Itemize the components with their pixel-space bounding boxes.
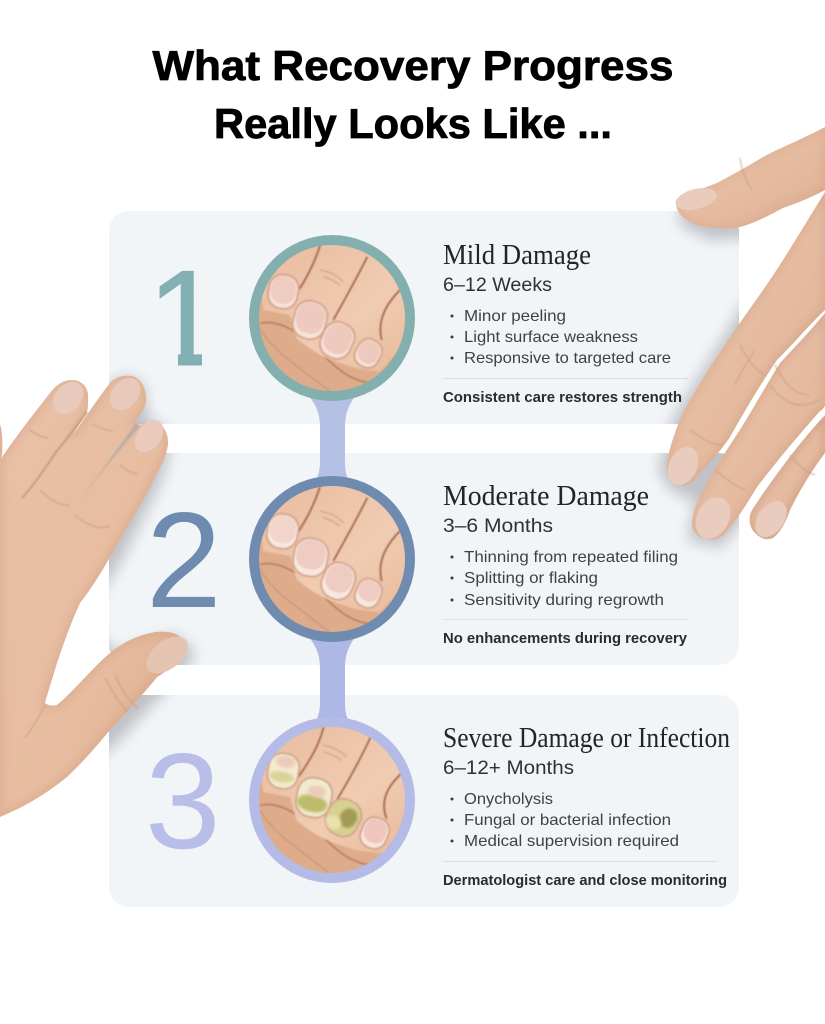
bullet list	[450, 549, 678, 609]
bullet list: Medical supervision required	[464, 833, 679, 850]
bullet list: Responsive to targeted care	[464, 350, 671, 367]
bullet list: Onycholysis	[464, 791, 553, 808]
right hand	[662, 127, 825, 545]
duration: 6–12+ Months	[443, 758, 574, 779]
bullet list: Light surface weakness	[464, 329, 638, 346]
bullet list: Sensitivity during regrowth	[464, 592, 664, 609]
panel: severe damage	[109, 695, 739, 907]
heading: moderate damage: Moderate Damage	[443, 481, 649, 512]
number 1: 1	[147, 242, 223, 394]
bullet list: Minor peeling	[464, 308, 566, 325]
nail: thumb	[673, 184, 719, 214]
step 3 circle illustration	[249, 717, 417, 883]
bullet list: Splitting or flaking	[464, 570, 598, 587]
nail: index finger	[662, 442, 704, 490]
nail: ring finger	[749, 495, 793, 543]
number 2: 2	[146, 484, 222, 636]
nail: middle finger	[689, 491, 737, 545]
bullet list: Thinning from repeated filing	[464, 549, 678, 566]
connector: step 2 to 3	[309, 637, 355, 731]
nail: thumb	[139, 629, 195, 681]
nail: little finger	[46, 376, 90, 420]
bullet list	[450, 791, 679, 850]
takeaway: Consistent care restores strength	[443, 389, 682, 406]
left hand	[0, 372, 195, 817]
step 2 circle illustration	[249, 476, 417, 642]
takeaway: Dermatologist care and close monitoring	[443, 872, 727, 889]
heading: mild damage: Mild Damage	[443, 240, 591, 271]
hand shadows on cards	[109, 211, 739, 760]
nail: ring finger	[103, 372, 147, 416]
panel: mild damage	[109, 211, 739, 424]
nail: middle finger	[129, 414, 169, 458]
panel: moderate damage	[109, 453, 739, 665]
title	[152, 42, 674, 147]
duration: 3–6 Months	[443, 516, 553, 537]
connector: step 1 to 2	[309, 396, 355, 490]
title: Really Looks Like ...	[214, 100, 612, 147]
step 1 circle illustration	[249, 235, 417, 401]
takeaway: No enhancements during recovery	[443, 630, 688, 647]
title: What Recovery Progress	[152, 42, 674, 89]
number 3: 3	[145, 725, 221, 877]
duration: 6–12 Weeks	[443, 275, 552, 296]
bullet list	[450, 308, 671, 367]
bullet list: Fungal or bacterial infection	[464, 812, 671, 829]
heading: severe damage or infection: Severe Damage or Infection	[443, 723, 730, 754]
